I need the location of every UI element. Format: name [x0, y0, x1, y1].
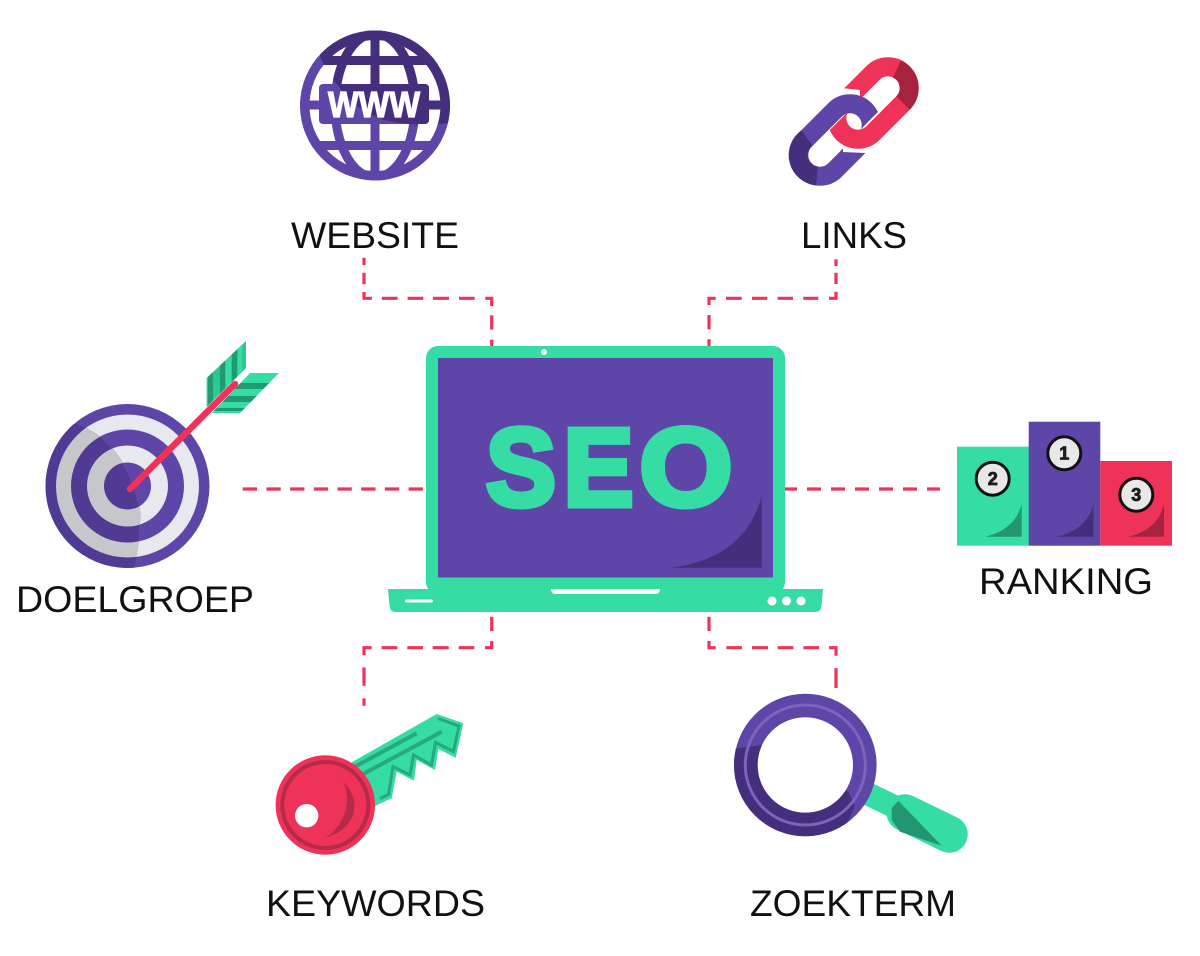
icon: globe with www: [300, 30, 450, 180]
title: SEO: E: [564, 406, 634, 530]
icon: ranking podium: [957, 422, 1172, 546]
connector: laptop to keywords: [364, 617, 492, 706]
icon: ranking podium: 3: [1131, 485, 1141, 505]
icon: ranking podium: 1: [1059, 444, 1069, 464]
title: SEO: [486, 406, 732, 530]
icon: ranking podium: 2: [988, 469, 998, 489]
title: SEO: O: [640, 406, 732, 530]
icon: key: [276, 714, 463, 855]
connector: doelgroep to laptop: [243, 487, 425, 491]
laptop with SEO screen: [388, 346, 823, 612]
icon: chain links: [798, 67, 909, 176]
label: website: WEBSITE: [291, 215, 459, 256]
icon: magnifying glass: [745, 705, 949, 846]
connector: laptop to zoekterm: [709, 617, 836, 688]
label: keywords: KEYWORDS: [266, 883, 485, 924]
title: SEO: S: [486, 406, 556, 530]
connector: links to laptop: [709, 259, 836, 346]
icon: target with arrow: [46, 335, 285, 568]
label: doelgroep: DOELGROEP: [16, 579, 254, 620]
label: zoekterm: ZOEKTERM: [750, 883, 956, 924]
icon: globe with www: WWW: [328, 84, 420, 125]
connector: laptop to ranking: [785, 487, 940, 491]
label: links: LINKS: [801, 215, 907, 256]
connector: website to laptop: [364, 258, 492, 346]
label: ranking: RANKING: [979, 561, 1153, 602]
